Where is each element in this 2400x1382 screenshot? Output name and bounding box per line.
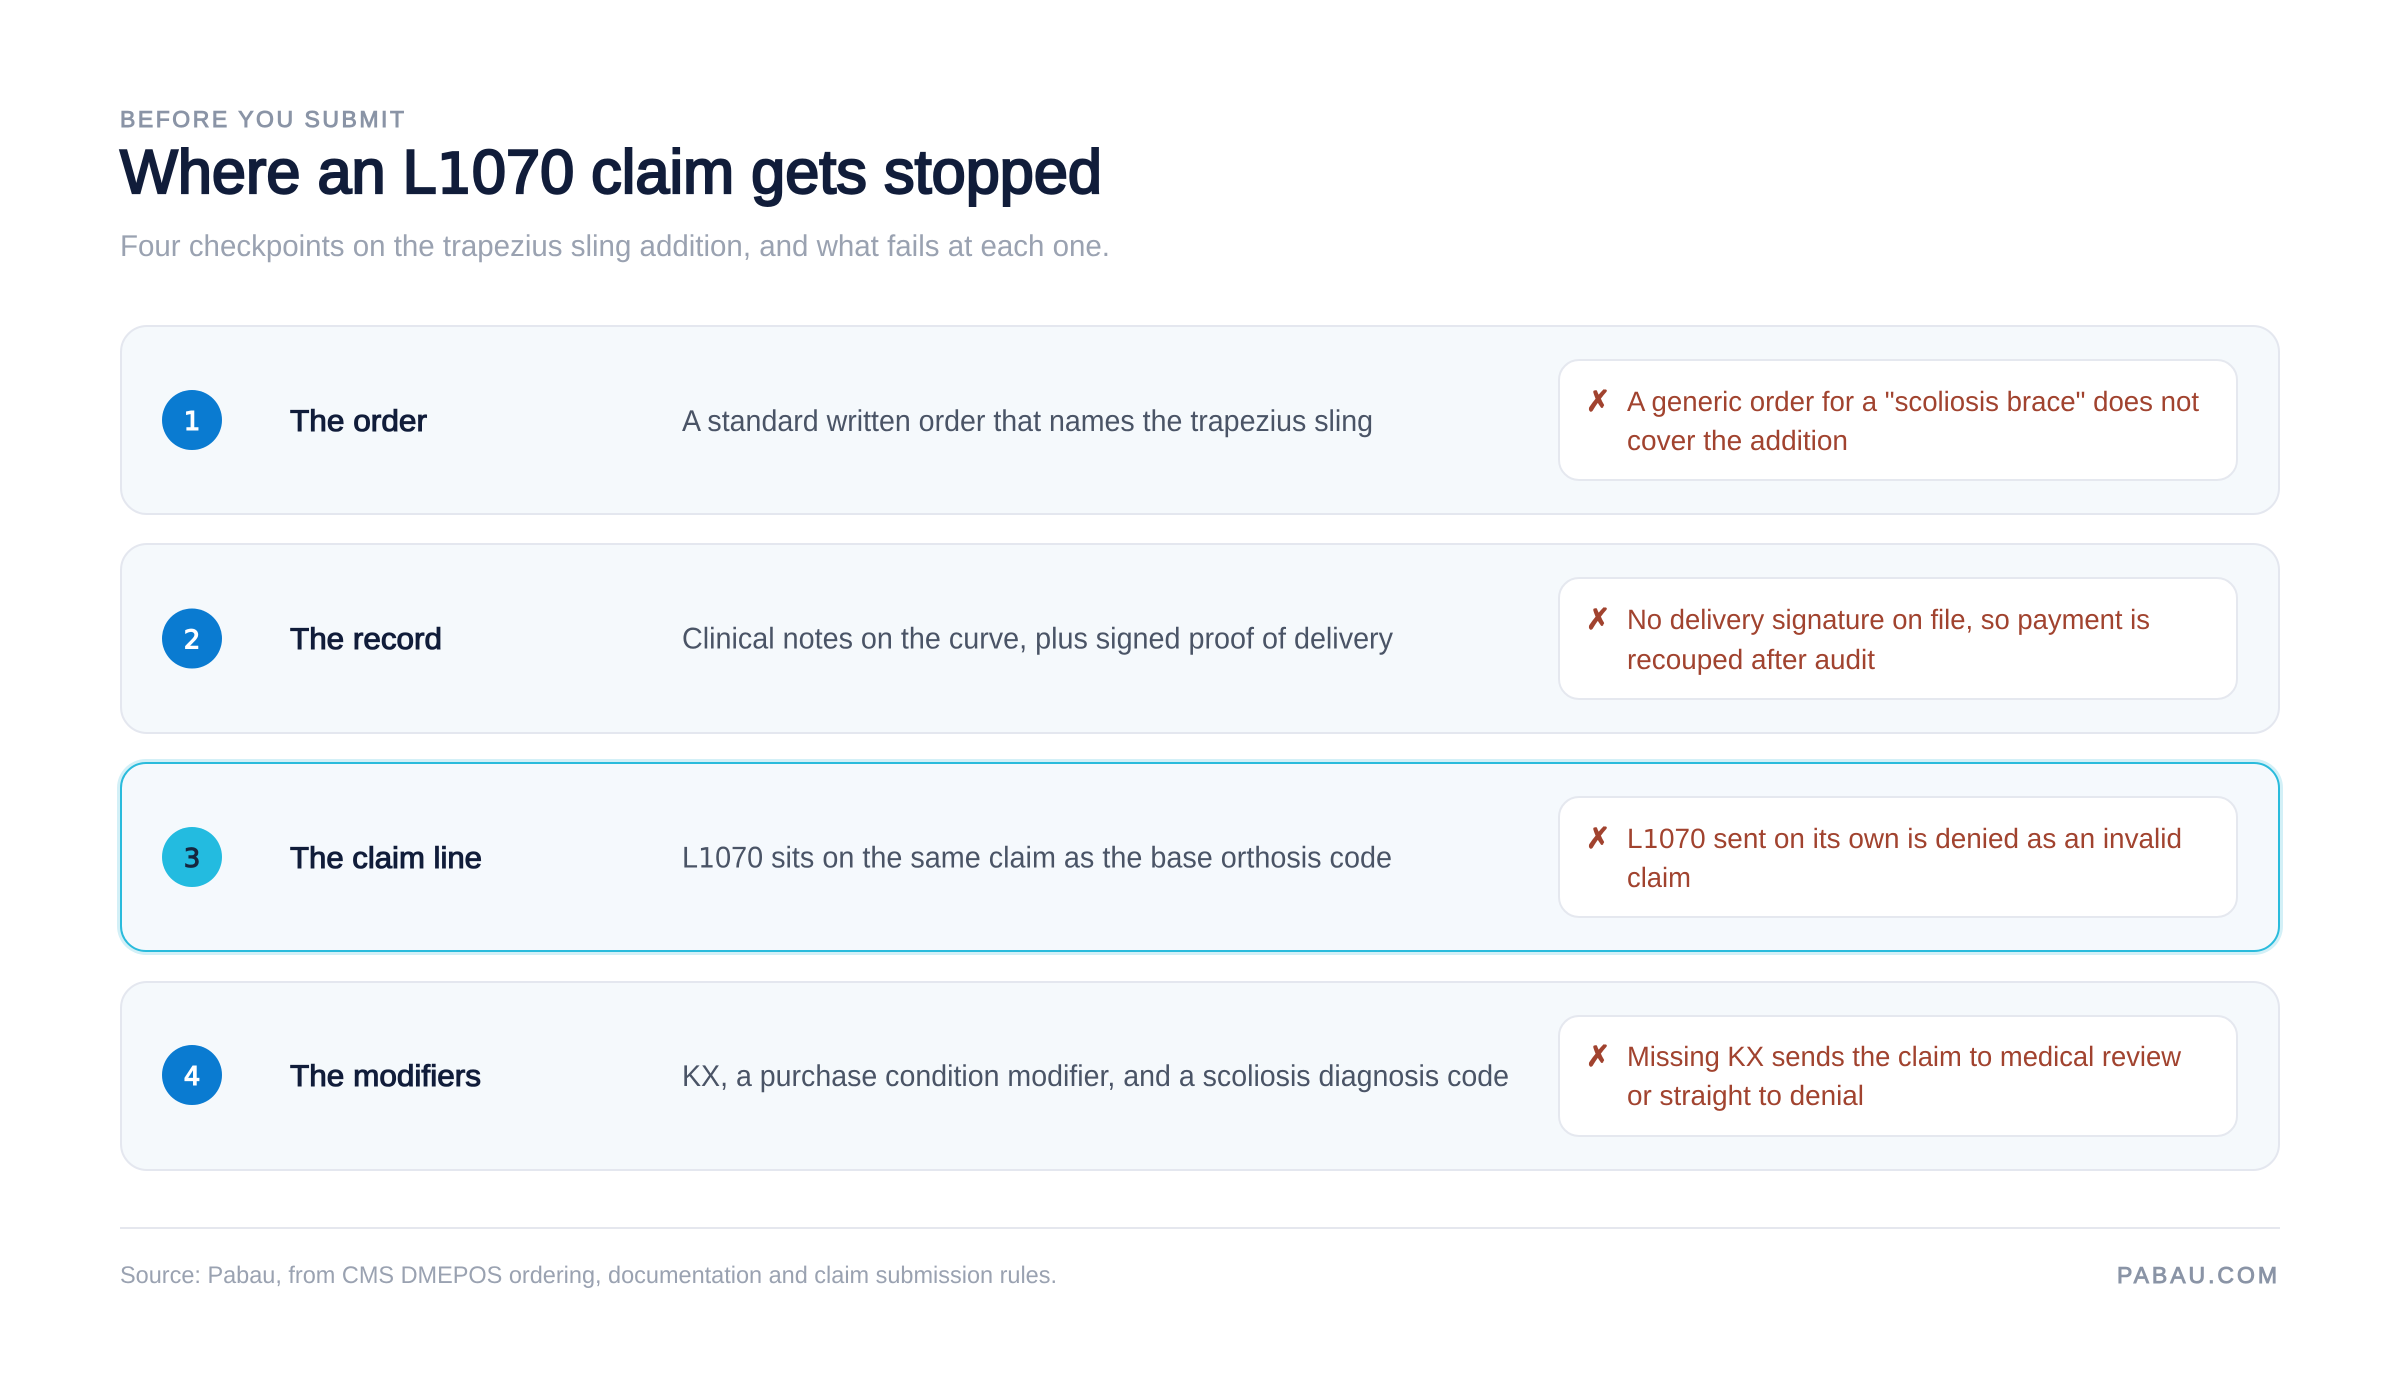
failure callout 4: Missing KX sends the claim to medical review xyxy=(1627,1041,2182,1072)
failure callout 1: A generic order for a "scoliosis brace" does not xyxy=(1627,386,2199,417)
checkpoint name 2: The record xyxy=(290,623,442,656)
failure callout 4: or straight to denial xyxy=(1627,1080,1864,1111)
title: Where an L1070 claim gets stopped xyxy=(120,138,1102,207)
checkpoint name 1: The order xyxy=(290,405,427,438)
failure callout 2: ✗ xyxy=(1586,602,1610,636)
failure callout 3: L1070 sent on its own is denied as an invalid xyxy=(1627,823,2182,855)
checkpoint name 3: The claim line xyxy=(290,842,482,875)
panel: checkpoint 2 xyxy=(121,544,2279,733)
step badge 3 xyxy=(162,827,222,887)
panel: checkpoint 4 xyxy=(121,982,2279,1170)
failure callout 3: ✗ xyxy=(1586,821,1610,855)
step badge 3: 3 xyxy=(184,844,200,874)
failure callout 2 xyxy=(1559,578,2237,699)
failure callout 4 xyxy=(1559,1016,2237,1136)
step badge 4 xyxy=(162,1045,222,1105)
source note: Source: Pabau, from CMS DMEPOS ordering, documentation and claim submission rules. xyxy=(120,1262,1057,1289)
step badge 2 xyxy=(162,608,222,668)
panel: checkpoint 3 (highlighted) xyxy=(117,759,2283,955)
step badge 2: 2 xyxy=(184,626,200,656)
failure callout 2: recouped after audit xyxy=(1627,644,1875,675)
step badge 4: 4 xyxy=(184,1062,200,1092)
panel: checkpoint 1 xyxy=(121,326,2279,514)
eyebrow: BEFORE YOU SUBMIT xyxy=(120,106,404,132)
subtitle: Four checkpoints on the trapezius sling addition, and what fails at each one. xyxy=(120,230,1110,263)
brand label: PABAU.COM xyxy=(2117,1262,2277,1288)
failure callout 1: cover the addition xyxy=(1627,425,1848,456)
failure callout 3 xyxy=(1559,797,2237,917)
step badge 1: 1 xyxy=(184,407,200,437)
failure callout 3: claim xyxy=(1627,862,1691,893)
failure callout 1 xyxy=(1559,360,2237,480)
checkpoint name 4: The modifiers xyxy=(290,1060,481,1093)
step badge 1 xyxy=(162,390,222,450)
failure callout 4: ✗ xyxy=(1586,1039,1610,1073)
checkpoint description 4: KX, a purchase condition modifier, and a scoliosis diagnosis code xyxy=(682,1060,1509,1093)
failure callout 2: No delivery signature on file, so payment is xyxy=(1627,604,2150,635)
checkpoint description 3: L1070 sits on the same claim as the base orthosis code xyxy=(682,842,1392,874)
checkpoint description 1: A standard written order that names the trapezius sling xyxy=(682,405,1373,438)
failure callout 1: ✗ xyxy=(1586,384,1610,418)
checkpoint description 2: Clinical notes on the curve, plus signed proof of delivery xyxy=(682,622,1393,656)
